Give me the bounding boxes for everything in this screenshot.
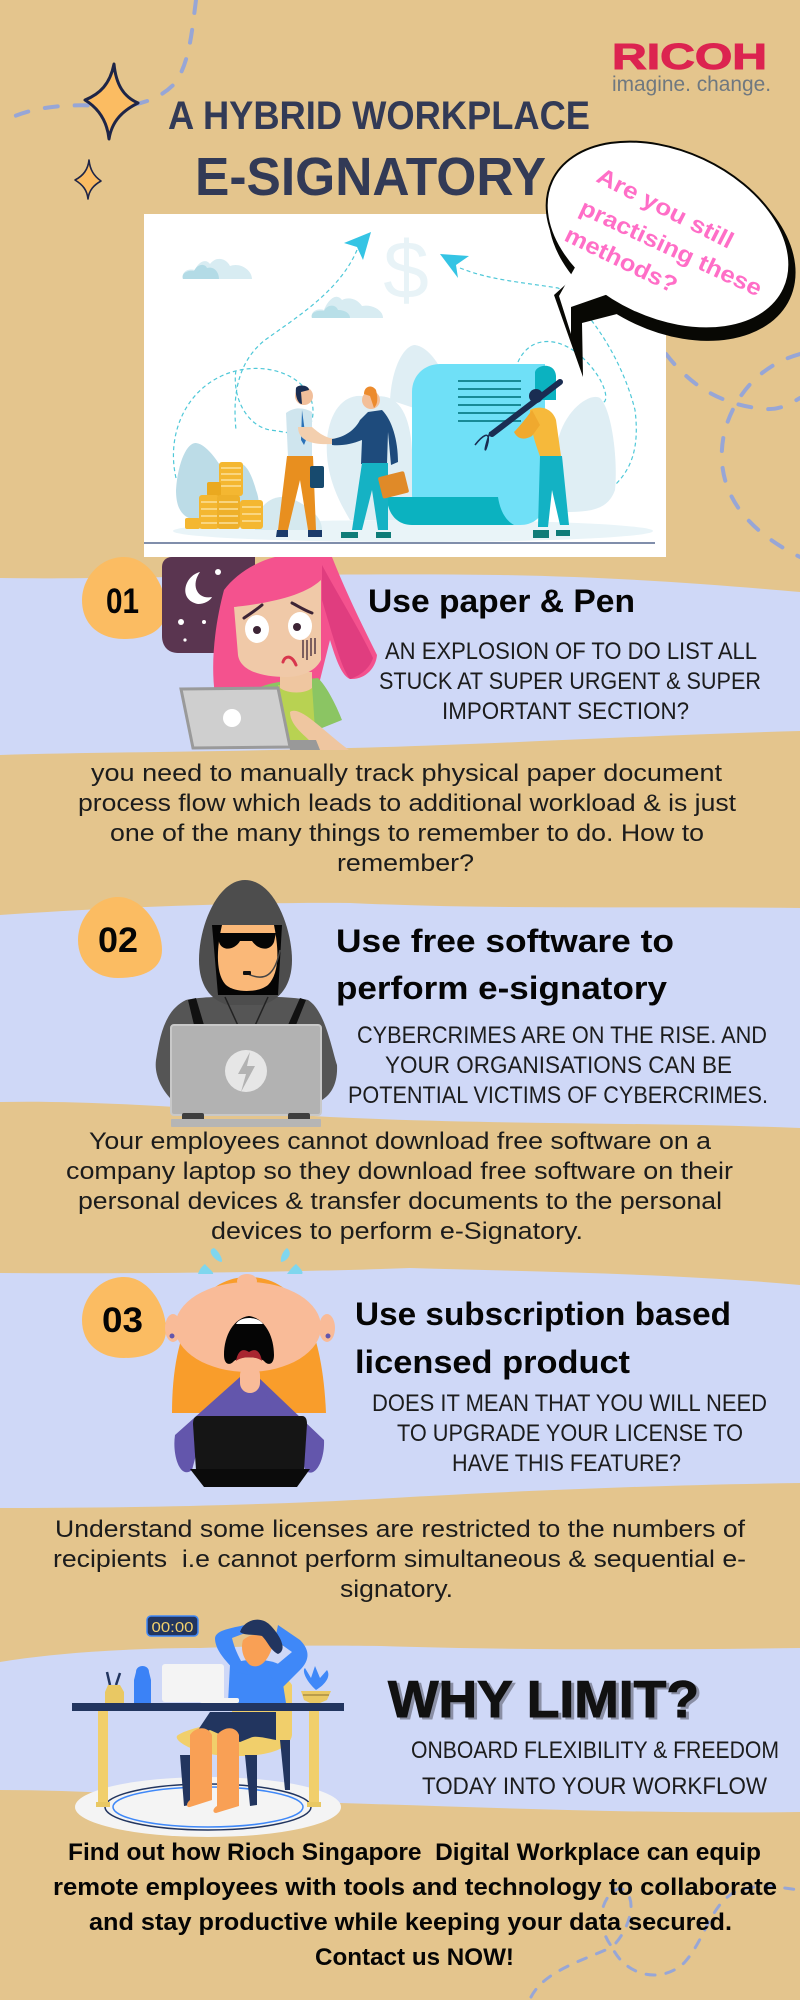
illustration: woman signing with giant pen xyxy=(492,382,570,538)
illustration: signed scroll xyxy=(387,364,556,525)
title: E-SIGNATORY xyxy=(195,147,546,207)
text block: section 01 explanation: remember? xyxy=(337,850,474,877)
panel: section 03 xyxy=(0,1248,800,1508)
icon: clouds and dollar sign: $ xyxy=(383,225,429,316)
icon: small sparkle star xyxy=(75,160,101,199)
illustration: stressed girl with laptop xyxy=(162,557,377,750)
text block: warning xyxy=(348,1022,768,1109)
text block: closing contact message xyxy=(53,1839,777,1971)
text block: section 02 explanation: Your employees cannot download free software on a xyxy=(89,1128,712,1155)
text block: section 01 explanation xyxy=(78,760,736,877)
text block: question xyxy=(379,638,761,725)
icon: timer xyxy=(147,1616,198,1636)
icon: number badge 02: 02 xyxy=(98,921,138,960)
text block: question: AN EXPLOSION OF TO DO LIST ALL xyxy=(385,638,757,665)
logo: Ricoh: imagine. change. xyxy=(612,73,771,96)
heading: WHY LIMIT? xyxy=(388,1671,699,1729)
text block: section 03 explanation: recipients i.e cannot perform simultaneous & sequential e- xyxy=(53,1546,746,1573)
text block: section 01 explanation: process flow which leads to additional workload & is just xyxy=(78,790,736,817)
heading xyxy=(355,1296,731,1380)
text block: question: HAVE THIS FEATURE? xyxy=(452,1450,681,1477)
text block: question: IMPORTANT SECTION? xyxy=(442,698,689,725)
heading xyxy=(336,923,674,1006)
callout text xyxy=(561,162,766,301)
text block: section 02 explanation xyxy=(66,1128,733,1245)
icon: number badge 03 xyxy=(82,1277,166,1358)
heading: licensed product xyxy=(355,1344,630,1380)
dashed flight paths and paper planes xyxy=(173,232,636,485)
text block: section 03 explanation: Understand some licenses are restricted to the numbers of xyxy=(55,1516,745,1543)
icon: number badge 01: 01 xyxy=(106,582,139,621)
text block: warning: CYBERCRIMES ARE ON THE RISE. AND xyxy=(357,1022,767,1049)
speech bubble xyxy=(516,105,800,379)
text block: question: STUCK AT SUPER URGENT & SUPER xyxy=(379,668,761,695)
text block: call to action: TODAY INTO YOUR WORKFLOW xyxy=(422,1773,767,1800)
title xyxy=(168,94,590,207)
icon: number badge 03: 03 xyxy=(102,1301,143,1340)
illustration: hooded hacker with laptop xyxy=(156,880,337,1127)
icon: large sparkle star xyxy=(85,64,138,139)
text block: closing contact message: Contact us NOW! xyxy=(315,1944,514,1971)
text block: section 02 explanation: personal devices & transfer documents to the personal xyxy=(78,1188,722,1215)
text block: section 03 explanation: signatory. xyxy=(340,1576,453,1603)
logo: Ricoh: RICOH xyxy=(612,36,767,77)
text block: section 03 explanation xyxy=(53,1516,746,1603)
icon: number badge 01 xyxy=(82,557,166,639)
illustration: crying girl at laptop xyxy=(165,1248,335,1487)
text block: warning: YOUR ORGANISATIONS CAN BE xyxy=(385,1052,732,1079)
heading: WHY LIMIT? xyxy=(391,1673,702,1731)
callout text: practising these xyxy=(576,194,766,301)
text block: closing contact message: Find out how Rioch Singapore Digital Workplace can equip xyxy=(68,1839,761,1866)
ground and foliage xyxy=(173,345,653,542)
heading: Use free software to xyxy=(336,923,674,959)
panel: section 02 xyxy=(0,880,800,1128)
panel: why limit xyxy=(0,1616,800,1837)
panel: hero illustration xyxy=(144,214,666,557)
callout text: methods? xyxy=(561,221,682,298)
text block: question xyxy=(372,1390,767,1477)
heading: perform e-signatory xyxy=(336,970,667,1006)
text block: section 02 explanation: company laptop so they download free software on their xyxy=(66,1158,733,1185)
text block: warning: POTENTIAL VICTIMS OF CYBERCRIMES. xyxy=(348,1082,768,1109)
callout text: Are you still xyxy=(593,162,738,254)
title: A HYBRID WORKPLACE xyxy=(168,94,590,138)
illustration: handshake businessmen xyxy=(276,386,409,538)
text block: closing contact message: and stay productive while keeping your data secured. xyxy=(89,1909,732,1936)
heading: Use subscription based xyxy=(355,1296,731,1332)
text block: section 01 explanation: one of the many things to remember to do. How to xyxy=(110,820,704,847)
icon: clouds and dollar sign xyxy=(183,225,429,318)
text block: question: DOES IT MEAN THAT YOU WILL NEED xyxy=(372,1390,767,1417)
text block: question: TO UPGRADE YOUR LICENSE TO xyxy=(397,1420,743,1447)
illustration: relaxed worker at desk xyxy=(72,1620,344,1837)
panel: section 01 xyxy=(0,557,800,755)
text block: call to action xyxy=(411,1737,779,1800)
logo: Ricoh xyxy=(612,36,771,96)
icon: timer: 00:00 xyxy=(152,1619,194,1636)
text block: section 02 explanation: devices to perform e-Signatory. xyxy=(211,1218,583,1245)
icon: coin stacks xyxy=(185,462,263,529)
text block: closing contact message: remote employees with tools and technology to collaborate xyxy=(53,1874,777,1901)
text block: section 01 explanation: you need to manually track physical paper document xyxy=(91,760,722,787)
icon: number badge 02 xyxy=(78,897,162,978)
heading: Use paper & Pen xyxy=(368,583,635,619)
